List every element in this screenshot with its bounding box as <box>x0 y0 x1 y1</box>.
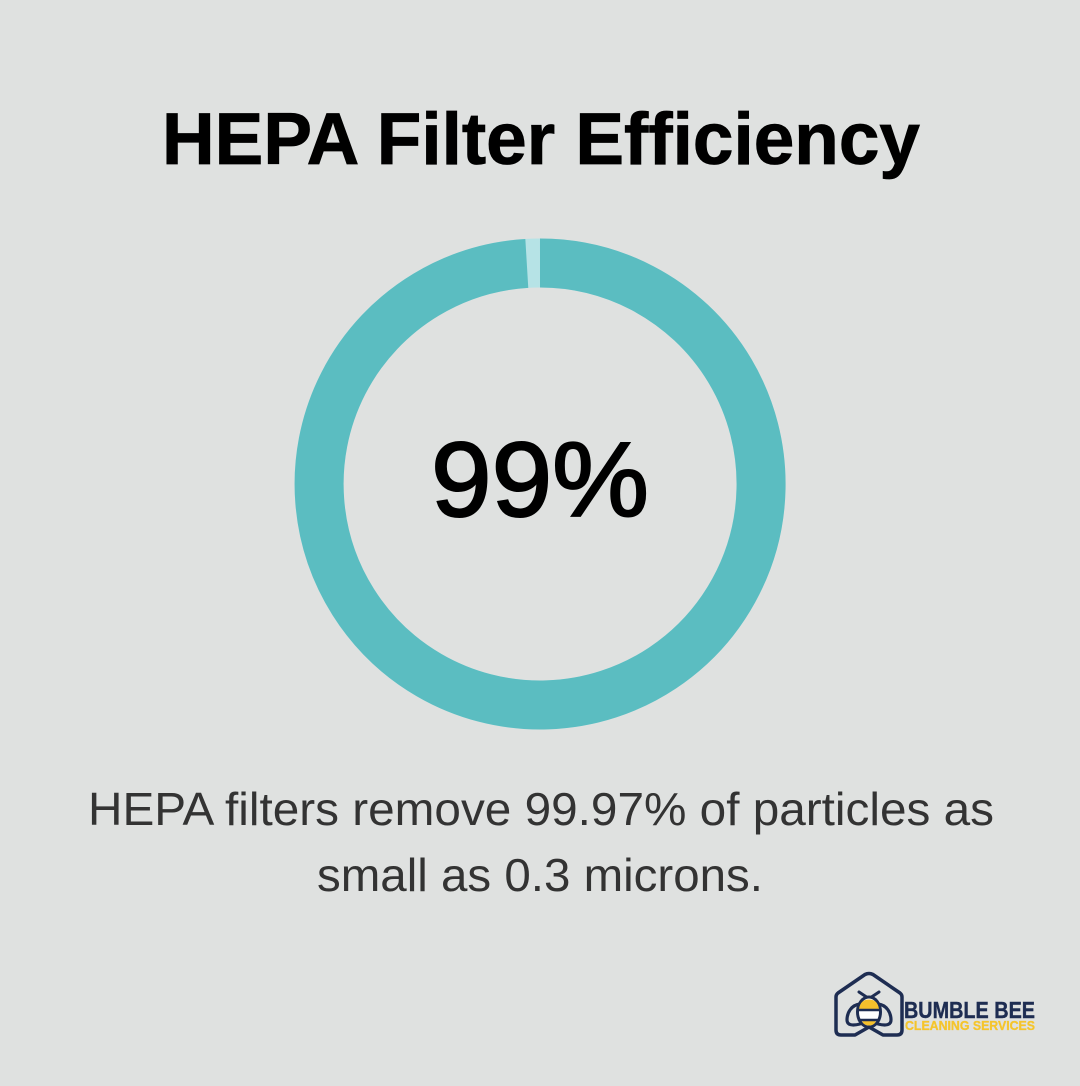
description text: small as 0.3 microns. <box>317 849 763 901</box>
chart segment: 99% <box>319 263 761 705</box>
icon: house with bee <box>836 974 902 1035</box>
center value: 99% <box>431 421 649 539</box>
description text: HEPA filters remove 99.97% of particles as <box>88 783 994 835</box>
donut chart: 99% <box>319 263 761 705</box>
logo name: BUMBLE BEE <box>904 997 1035 1023</box>
logo: Bumble Bee Cleaning Services <box>836 974 1035 1035</box>
chart segment: remaining 1% <box>319 263 761 705</box>
logo tagline: CLEANING SERVICES <box>905 1019 1035 1033</box>
description text <box>88 783 994 901</box>
title: HEPA Filter Efficiency <box>162 99 920 180</box>
